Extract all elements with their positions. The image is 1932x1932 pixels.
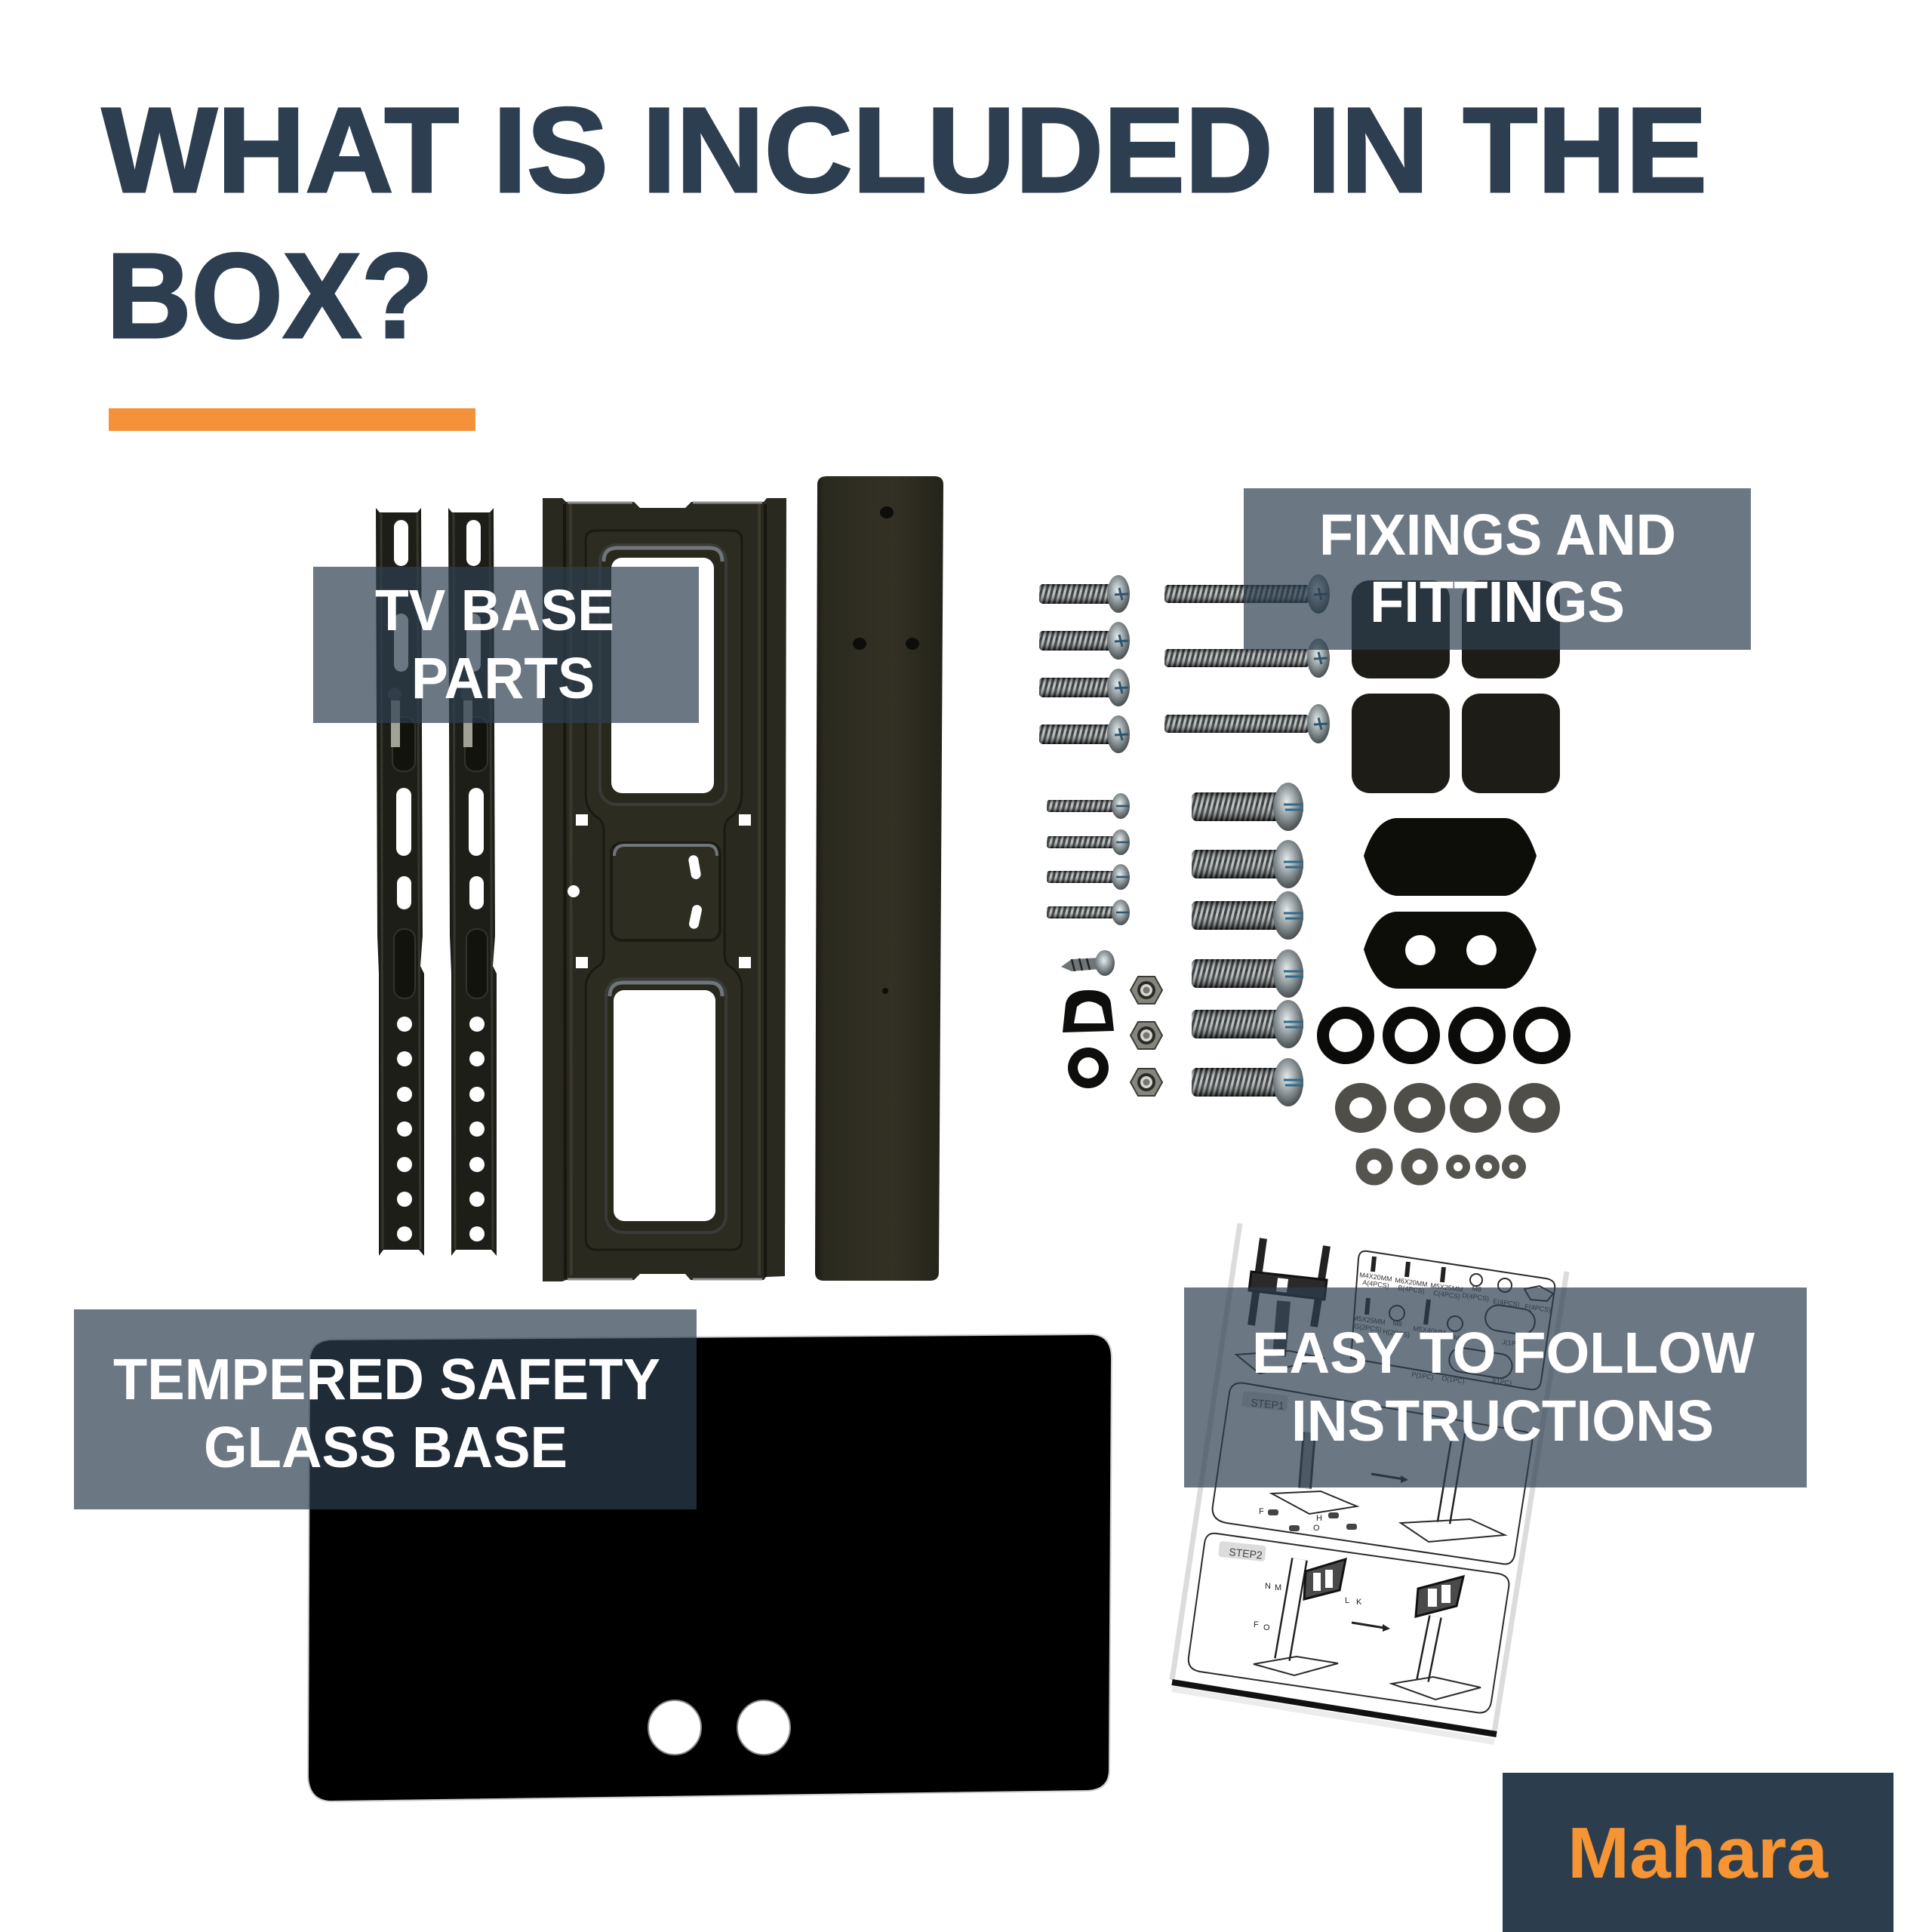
parts icons and captions: D(4PCS) — [1462, 1291, 1490, 1303]
parts list box — [1351, 1251, 1555, 1389]
parts icons and captions: J(1PC) — [1491, 1377, 1512, 1387]
step 1 box: H — [1316, 1514, 1322, 1523]
left rail — [376, 508, 424, 1256]
parts icons and captions: M4X20MM — [1359, 1271, 1392, 1283]
label: TV base parts — [313, 567, 699, 723]
solid oval pad — [1364, 818, 1537, 896]
step 2 box: M — [1275, 1583, 1281, 1592]
step 2 box — [1189, 1534, 1509, 1712]
label: tempered safety glass base — [74, 1309, 697, 1509]
long screws — [1164, 574, 1330, 743]
D-shaped spacer — [1063, 990, 1114, 1032]
panel: fixings and fittings — [1039, 574, 1564, 1180]
parts icons and captions: F(4PCS) — [1524, 1303, 1552, 1314]
panel: TV base parts — [376, 476, 943, 1281]
title: WHAT IS INCLUDED IN THE — [102, 82, 1707, 217]
oval pad with two holes — [1364, 912, 1537, 989]
parts icons and captions: M6X20MM — [1395, 1276, 1428, 1288]
centre mounting bracket — [543, 498, 786, 1281]
assembled mount drawing — [1236, 1238, 1327, 1374]
hex nuts — [1131, 977, 1162, 1096]
step 1 box — [1213, 1383, 1532, 1564]
parts icons and captions: M6 — [1454, 1334, 1464, 1343]
orange accent bar — [109, 408, 475, 431]
label: TV base parts: TV BASE — [375, 578, 614, 643]
step 2 box: L — [1345, 1596, 1349, 1605]
small black washer — [1068, 1048, 1109, 1088]
panel: instruction sheet — [1172, 1223, 1567, 1742]
title — [102, 82, 1707, 363]
step 2 box: N — [1265, 1582, 1271, 1591]
parts icons and captions: C(4PCS) — [1433, 1289, 1461, 1300]
parts icons and captions: J(1PC) — [1502, 1338, 1524, 1349]
step 2 box: F — [1254, 1620, 1259, 1629]
parts icons and captions: G(2PCS) — [1354, 1322, 1382, 1334]
right rail — [448, 508, 497, 1256]
self-tapping screw — [1061, 950, 1115, 976]
label: tempered safety glass base: GLASS BASE — [204, 1415, 568, 1480]
paper — [1172, 1223, 1567, 1734]
step 1 box: STEP1 — [1251, 1396, 1285, 1412]
step 2 box: O — [1263, 1623, 1270, 1632]
parts icons and captions: B(4PCS) — [1398, 1284, 1425, 1295]
parts icons and captions: H(2PCS) — [1383, 1327, 1411, 1339]
label: easy to follow instructions: EASY TO FOLLOW — [1252, 1321, 1755, 1386]
parts icons and captions: M5X25MM — [1352, 1314, 1386, 1326]
parts icons and captions: E(4PCS) — [1493, 1297, 1520, 1309]
label: fixings and fittings: FIXINGS AND — [1319, 503, 1676, 568]
parts icons and captions: M5X25MM — [1430, 1281, 1463, 1294]
label: easy to follow instructions — [1184, 1287, 1807, 1487]
label: TV base parts: PARTS — [411, 646, 595, 711]
title: BOX? — [106, 228, 433, 363]
parts icons and captions: M8 — [1472, 1284, 1482, 1294]
parts icons and captions: M8 — [1392, 1319, 1403, 1328]
step 2 box: STEP2 — [1229, 1546, 1263, 1561]
label: fixings and fittings: FITTINGS — [1370, 570, 1625, 635]
foam pads — [1352, 580, 1560, 793]
paper edges — [1172, 1223, 1567, 1742]
small screws — [1047, 793, 1130, 925]
step 1 box: O — [1313, 1524, 1320, 1533]
glass holes — [648, 1700, 790, 1755]
step 1 box: F — [1259, 1507, 1264, 1516]
panel: tempered glass base — [308, 1334, 1112, 1801]
logo panel — [1503, 1773, 1894, 1932]
parts icons and captions: A(4PCS) — [1362, 1278, 1389, 1290]
large black washers — [1323, 1013, 1564, 1058]
upright post section — [815, 476, 943, 1281]
metal washers — [1335, 1083, 1560, 1133]
small metal washers — [1361, 1154, 1522, 1180]
label: tempered safety glass base: TEMPERED SAFETY — [113, 1347, 660, 1412]
short screws — [1039, 575, 1130, 753]
logo panel: Mahara — [1567, 1813, 1829, 1894]
step 2 box: K — [1356, 1598, 1362, 1607]
label: easy to follow instructions: INSTRUCTIONS — [1291, 1389, 1714, 1454]
parts icons and captions: O(1PC) — [1441, 1374, 1465, 1385]
parts icons and captions — [1352, 1257, 1553, 1387]
label: fixings and fittings — [1244, 488, 1751, 650]
parts icons and captions: P(1PC) — [1411, 1371, 1434, 1381]
thick screws — [1192, 783, 1303, 1106]
parts icons and captions: M5X40MM — [1413, 1324, 1446, 1337]
